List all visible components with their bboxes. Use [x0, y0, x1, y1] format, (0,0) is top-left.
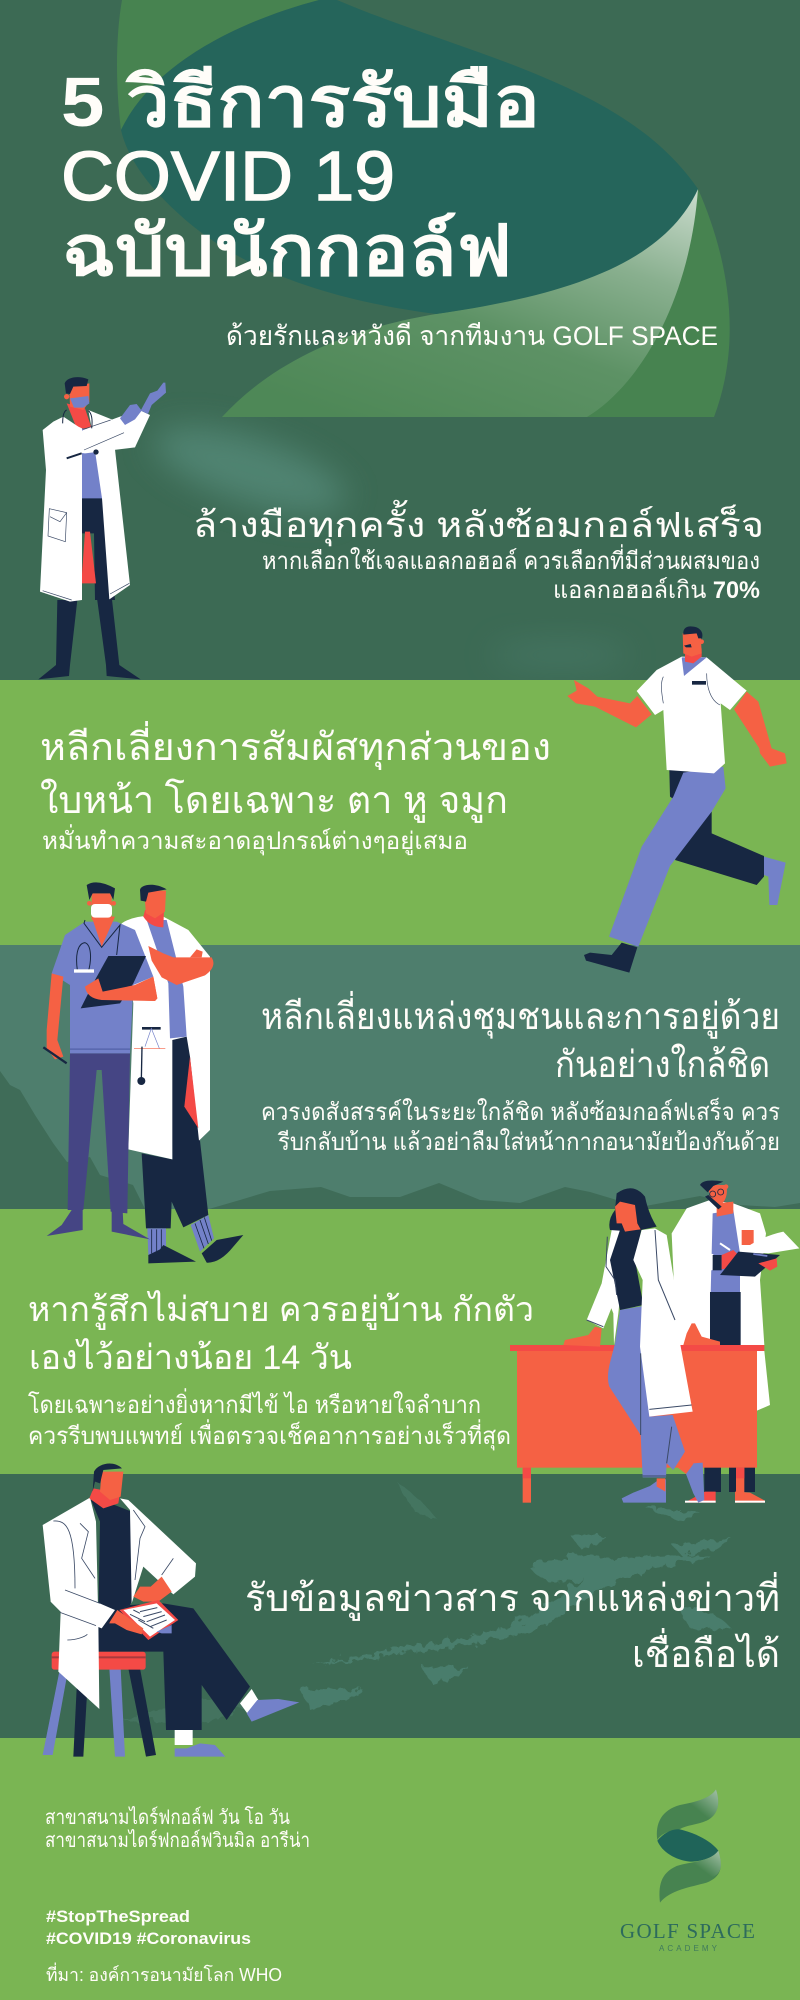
text block: branches: สาขาสนามไดร์ฟกอล์ฟ วัน โอ วัน	[45, 1806, 290, 1829]
title: COVID 19	[61, 137, 395, 215]
decorative leaf: lower green leaf	[222, 189, 730, 417]
panel: section 3 teal band with mountains	[0, 945, 800, 1209]
logo: Golf Space Academy: ACADEMY	[659, 1944, 718, 1953]
text block: branches	[45, 1806, 310, 1852]
decorative leaf: teal leaf	[121, 0, 698, 314]
logo: Golf Space Academy: GOLF SPACE	[620, 1919, 755, 1943]
panel: section 1 dark green background	[0, 0, 800, 680]
text block: trusted news	[245, 1572, 780, 1676]
text block: trusted news: รับข้อมูลข่าวสาร จากแหล่งข่าวที่	[245, 1572, 780, 1621]
icon: seated doctor on stool	[43, 1464, 299, 1757]
text block: avoid touching face: ใบหน้า โดยเฉพาะ ตา หู จมูก	[40, 778, 508, 823]
text block: stay at home: หากรู้สึกไม่สบาย ควรอยู่บ้าน กักตัว	[28, 1290, 534, 1330]
title: 5 วิธีการรับมือ	[61, 63, 540, 141]
text block: hashtags: #COVID19 #Coronavirus	[46, 1929, 251, 1948]
text block: branches: สาขาสนามไดร์ฟกอล์ฟวินมิล อารีน่า	[45, 1829, 310, 1852]
text block: wash hands: หากเลือกใช้เจลแอลกอฮอล์ ควรเลือกที่มีส่วนผสมของ	[262, 544, 760, 575]
text block: stay at home: โดยเฉพาะอย่างยิ่งหากมีไข้ ไอ หรือหายใจลำบาก	[28, 1388, 481, 1419]
text block: avoid touching face: หลีกเลี่ยงการสัมผัสทุกส่วนของ	[40, 721, 551, 770]
title: ฉบับนักกอล์ฟ	[62, 212, 512, 290]
icon: two doctors at orange desk	[510, 1181, 799, 1503]
text block: avoid crowds	[261, 990, 780, 1156]
panel: section 5 dark green band with texture	[0, 1474, 800, 1738]
title	[61, 63, 540, 290]
text block: hashtags	[46, 1907, 251, 1948]
text block: wash hands: แอลกอฮอล์เกิน 70%	[553, 576, 760, 604]
source note: ที่มา: องค์การอนามัยโลก WHO	[46, 1962, 282, 1985]
decorative leaf: upper green leaf	[117, 0, 319, 130]
icon: two doctors standing	[43, 882, 243, 1263]
subtitle: ด้วยรักและหวังดี จากทีมงาน GOLF SPACE	[226, 321, 718, 351]
text block: hashtags: #StopTheSpread	[46, 1907, 190, 1926]
logo: Golf Space Academy	[620, 1789, 755, 1953]
text block: avoid touching face: หมั่นทำความสะอาดอุปกรณ์ต่างๆอยู่เสมอ	[42, 824, 468, 856]
text block: stay at home: ควรรีบพบแพทย์ เพื่อตรวจเช็คอาการอย่างเร็วที่สุด	[28, 1419, 511, 1451]
text block: avoid touching face	[40, 721, 551, 856]
text block: stay at home: เองไว้อย่างน้อย 14 วัน	[29, 1338, 352, 1377]
panel: section 4 green band	[0, 1209, 800, 1474]
text block: wash hands	[193, 499, 764, 604]
text block: wash hands: ล้างมือทุกครั้ง หลังซ้อมกอล์ฟเสร็จ	[193, 499, 764, 546]
icon: running doctor	[567, 626, 787, 973]
panel: footer green band	[0, 1738, 800, 2000]
text block: stay at home	[28, 1290, 534, 1451]
text block: trusted news: เชื่อถือได้	[632, 1628, 780, 1676]
panel: section 2 green band	[0, 680, 800, 945]
icon: doctor with gloves and mask	[38, 377, 166, 679]
text block: avoid crowds: กันอย่างใกล้ชิด	[555, 1043, 770, 1085]
